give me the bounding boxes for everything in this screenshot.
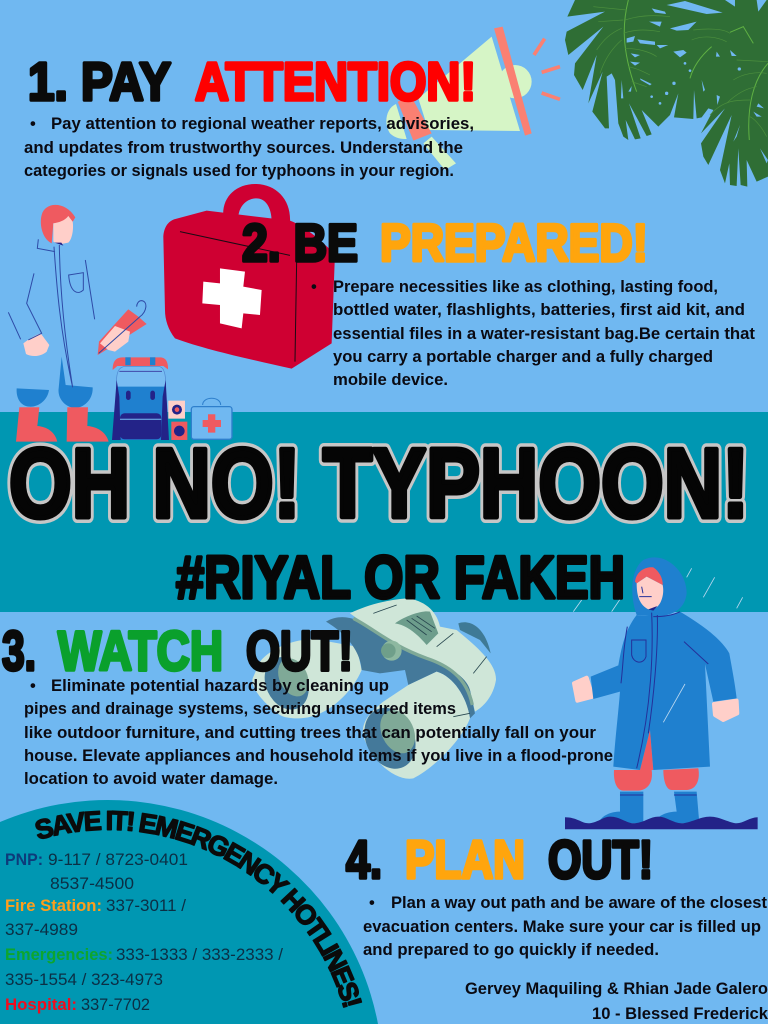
subtitle hashtag: #RIYAL OR FAKEH [176,544,625,611]
hotline numbers: 9-117 / 8723-0401 [48,851,188,869]
heading: 4. Plan Out [346,830,653,890]
curved heading: SAVE IT! EMERGENCY HOTLINES! [35,810,362,1008]
text: section 2 body: • [311,278,317,296]
text: section 4 body [363,894,767,959]
hotline numbers: 8537-4500 [50,875,134,893]
hotline numbers: 337-4989 [5,921,78,939]
text: section 3 body: house. Elevate appliances and household items if you live in a flood-prone [24,747,613,765]
text: section 1 body: • [30,115,36,133]
icon: first aid kit [163,184,335,369]
text: section 1 body: and updates from trustworthy sources. Understand the [24,139,463,157]
hotline numbers: 337-3011 / [106,897,186,915]
text: section 3 body [24,677,613,788]
text: section 4 body: evacuation centers. Make sure your car is filled up [363,918,761,936]
heading: 3. Watch Out: 3. [2,619,36,682]
text: section 3 body: pipes and drainage systems, securing unsecured items [24,700,456,718]
hotline numbers [5,851,283,1014]
icon: backpack and supplies [112,357,232,440]
heading: 3. Watch Out [2,619,353,682]
icon: megaphone [386,27,560,170]
icon: person in raincoat [565,557,758,829]
text: section 2 body: bottled water, flashlights, batteries, first aid kit, and [333,301,745,319]
text: section 1 body [24,115,474,180]
text: section 1 body: categories or signals used for typhoons in your region. [24,162,454,180]
hotline numbers: Fire Station: [5,897,102,915]
hotline numbers: 337-7702 [81,996,150,1014]
heading: 3. Watch Out: OUT! [246,619,353,682]
text: section 2 body: mobile device. [333,371,448,389]
hotline numbers: Hospital: [5,996,77,1014]
text: section 2 body: you carry a portable charger and a fully charged [333,348,713,366]
text: section 1 body: Pay attention to regional weather reports, advisories, [51,115,474,133]
heading: 4. Plan Out: OUT! [548,830,653,890]
icon: person with umbrella [8,205,147,442]
text: section 2 body [311,278,756,389]
text: section 2 body: essential files in a water-resistant bag.Be certain that [333,325,756,343]
title band [0,412,768,612]
icon: monstera leaves [565,0,768,187]
heading: 4. Plan Out: 4. [346,830,382,890]
heading: 2. Be Prepared [242,214,648,273]
text: section 4 body: and prepared to go quickly if needed. [363,941,659,959]
text: section 3 body: Eliminate potential hazards by cleaning up [51,677,389,695]
heading: 1. Pay Attention: ATTENTION! [195,52,476,112]
heading: 3. Watch Out: WATCH [58,619,223,682]
text: section 4 body: • [369,894,375,912]
text: section 3 body: location to avoid water damage. [24,770,278,788]
hotline numbers: PNP: [5,851,43,869]
credits [465,980,768,1023]
heading: 2. Be Prepared: 2. BE [242,214,358,273]
heading: 4. Plan Out: PLAN [405,830,525,890]
hotlines panel [0,800,378,1024]
heading: 1. Pay Attention [28,52,476,112]
text: section 4 body: Plan a way out path and be aware of the closest [391,894,767,912]
hotline numbers: Emergencies: [5,946,113,964]
text: section 3 body: like outdoor furniture, and cutting trees that can potentially fall on your [24,724,597,742]
text: section 3 body: • [30,677,36,695]
credits: 10 - Blessed Frederick [592,1005,768,1023]
icon: binoculars [252,598,496,779]
hotline numbers: 333-1333 / 333-2333 / [116,946,283,964]
heading: 2. Be Prepared: PREPARED! [380,214,648,273]
heading: 1. Pay Attention: 1. PAY [28,52,171,112]
credits: Gervey Maquiling & Rhian Jade Galero [465,980,768,998]
text: section 2 body: Prepare necessities like as clothing, lasting food, [333,278,718,296]
hotline numbers: 335-1554 / 323-4973 [5,971,163,989]
